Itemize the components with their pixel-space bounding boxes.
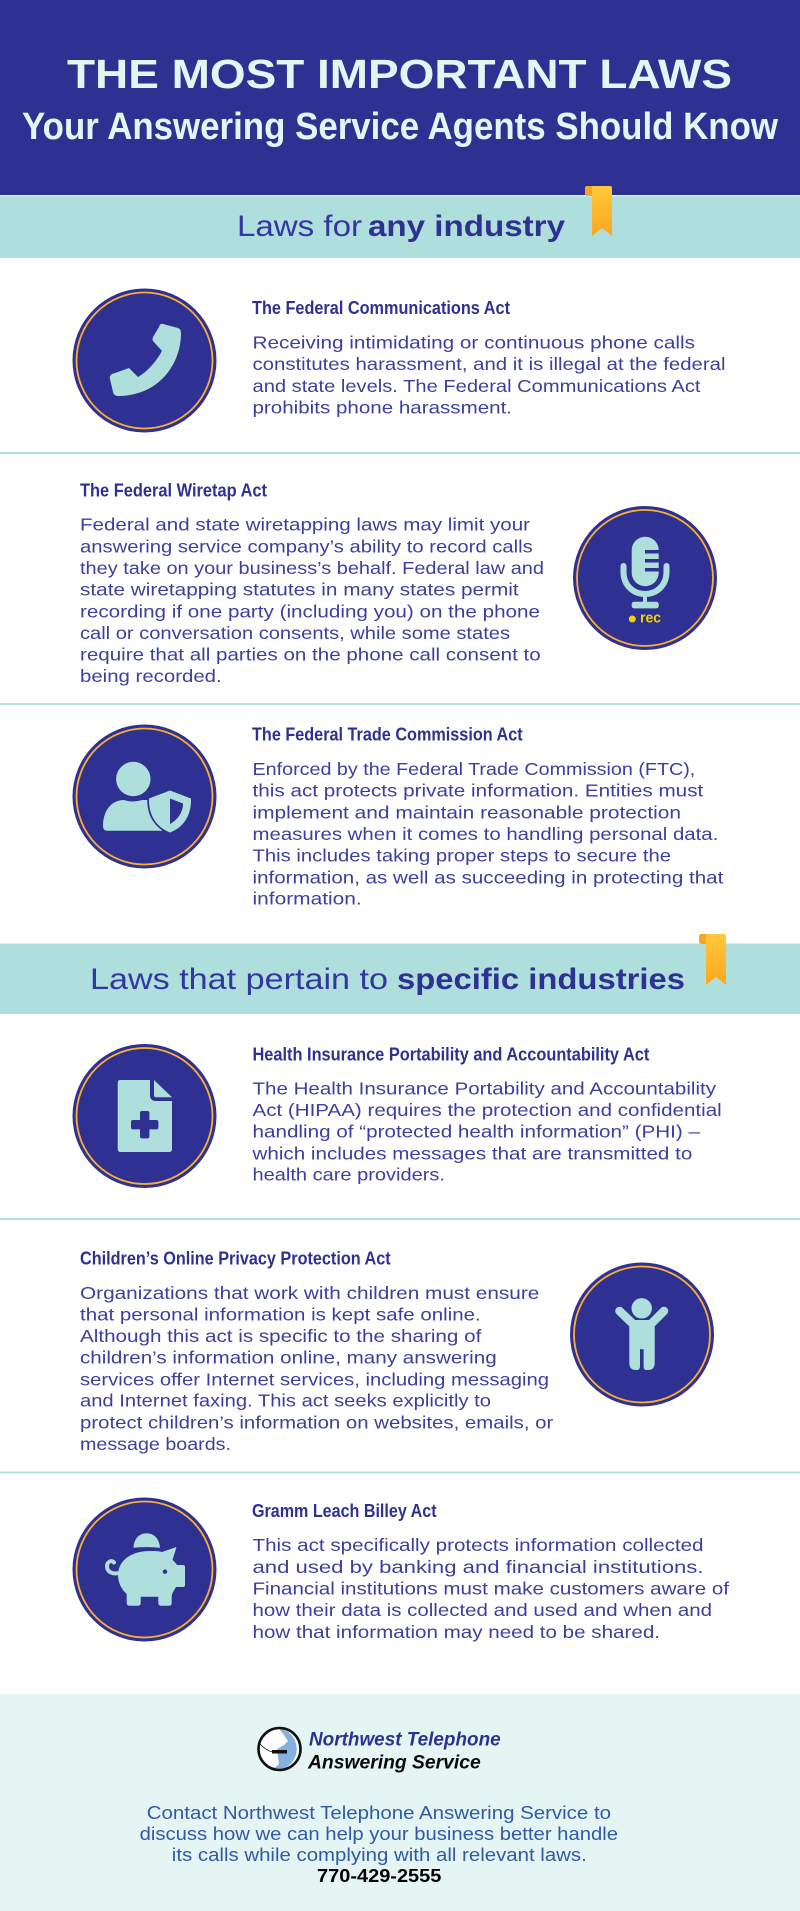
law description: information.: [252, 888, 362, 908]
law title: The Federal Trade Commission Act: [252, 725, 523, 745]
contact text: Contact Northwest Telephone Answering Service to: [147, 1803, 611, 1823]
law description: measures when it comes to handling personal data.: [252, 824, 718, 844]
law description: and used by banking and financial institutions.: [252, 1557, 704, 1577]
law description: The Health Insurance Portability and Accountability: [252, 1078, 716, 1098]
law description: Organizations that work with children must ensure: [80, 1283, 539, 1303]
logo: Northwest Telephone: [309, 1729, 501, 1751]
law description: [80, 515, 544, 686]
section band: specific industries: [0, 934, 800, 1014]
icon: person with shield: [72, 724, 216, 868]
law description: require that all parties on the phone call consent to: [80, 644, 541, 664]
law description: protect children’s information on websites, emails, or: [80, 1412, 553, 1432]
law description: Act (HIPAA) requires the protection and confidential: [252, 1100, 722, 1120]
section heading: Laws for: [237, 210, 362, 243]
law description: children’s information online, many answering: [80, 1348, 497, 1368]
section heading: any industry: [368, 210, 565, 243]
footer panel: [0, 1694, 800, 1911]
header banner: [0, 0, 800, 195]
law description: health care providers.: [252, 1165, 445, 1185]
icon: piggy bank: [72, 1498, 216, 1642]
section band: any industry: [0, 186, 800, 258]
section heading: specific industries: [397, 963, 685, 996]
law description: that personal information is kept safe online.: [80, 1304, 481, 1324]
law description: Receiving intimidating or continuous phone calls: [252, 332, 695, 352]
law description: state wiretapping statutes in many states permit: [80, 580, 519, 600]
law description: Financial institutions must make customers aware of: [252, 1578, 729, 1598]
icon: microphone rec: [573, 506, 717, 650]
law title: Gramm Leach Billey Act: [252, 1501, 437, 1521]
panel: Federal Communications Act: [72, 288, 726, 432]
law description: This includes taking proper steps to secure the: [252, 846, 671, 866]
law description: Federal and state wiretapping laws may limit your: [80, 515, 530, 535]
law description: Enforced by the Federal Trade Commission (FTC),: [252, 759, 695, 779]
panel: Gramm Leach Billey Act: [72, 1498, 729, 1642]
law description: answering service company’s ability to record calls: [80, 536, 533, 556]
panel: HIPAA: [72, 1044, 722, 1188]
law title: Health Insurance Portability and Accountability Act: [252, 1045, 649, 1065]
title line 1: THE MOST IMPORTANT LAWS: [67, 51, 732, 97]
contact text: [140, 1803, 618, 1865]
law description: information, as well as succeeding in protecting that: [252, 867, 723, 887]
panel: Federal Trade Commission Act: [72, 724, 723, 908]
law description: [252, 332, 726, 418]
logo: [258, 1728, 501, 1773]
law title: Children’s Online Privacy Protection Act: [80, 1248, 391, 1268]
law description: services offer Internet services, including messaging: [80, 1369, 549, 1389]
section heading: Laws that pertain to: [90, 963, 388, 996]
law description: [252, 759, 723, 908]
law description: implement and maintain reasonable protection: [252, 802, 681, 822]
law title: The Federal Wiretap Act: [80, 481, 267, 501]
icon: medical document: [72, 1044, 216, 1188]
contact text: discuss how we can help your business better handle: [140, 1824, 618, 1844]
law description: prohibits phone harassment.: [252, 398, 512, 418]
contact text: its calls while complying with all relevant laws.: [172, 1845, 587, 1865]
law description: [252, 1535, 729, 1642]
icon: ribbon: [699, 934, 726, 985]
icon: ribbon: [585, 186, 612, 236]
law description: [80, 1283, 553, 1454]
law description: [251, 1078, 722, 1185]
law description: and state levels. The Federal Communications Act: [252, 376, 701, 396]
icon: child: [570, 1262, 714, 1406]
law description: message boards.: [80, 1434, 231, 1454]
law description: being recorded.: [80, 666, 222, 686]
panel: COPPA: [80, 1248, 714, 1454]
law description: which includes messages that are transmitted to: [251, 1143, 692, 1163]
law description: call or conversation consents, while some states: [80, 623, 510, 643]
phone number: 770-429-2555: [317, 1866, 441, 1886]
law description: constitutes harassment, and it is illegal at the federal: [252, 354, 726, 374]
law description: how that information may need to be shared.: [252, 1622, 660, 1642]
icon: phone: [72, 288, 216, 432]
law description: and Internet faxing. This act seeks explicitly to: [80, 1391, 491, 1411]
law description: recording if one party (including you) on the phone: [80, 601, 540, 621]
law description: Although this act is specific to the sharing of: [80, 1326, 481, 1346]
law description: they take on your business’s behalf. Federal law and: [80, 558, 544, 578]
law title: The Federal Communications Act: [252, 298, 510, 318]
law description: handling of “protected health information” (PHI) –: [252, 1122, 700, 1142]
law description: how their data is collected and used and when and: [252, 1600, 712, 1620]
icon: microphone rec: rec: [640, 610, 661, 627]
panel: Federal Wiretap Act: [80, 481, 717, 686]
law description: This act specifically protects information collected: [252, 1535, 704, 1555]
logo: Answering Service: [307, 1751, 481, 1773]
law description: this act protects private information. Entities must: [252, 781, 703, 801]
